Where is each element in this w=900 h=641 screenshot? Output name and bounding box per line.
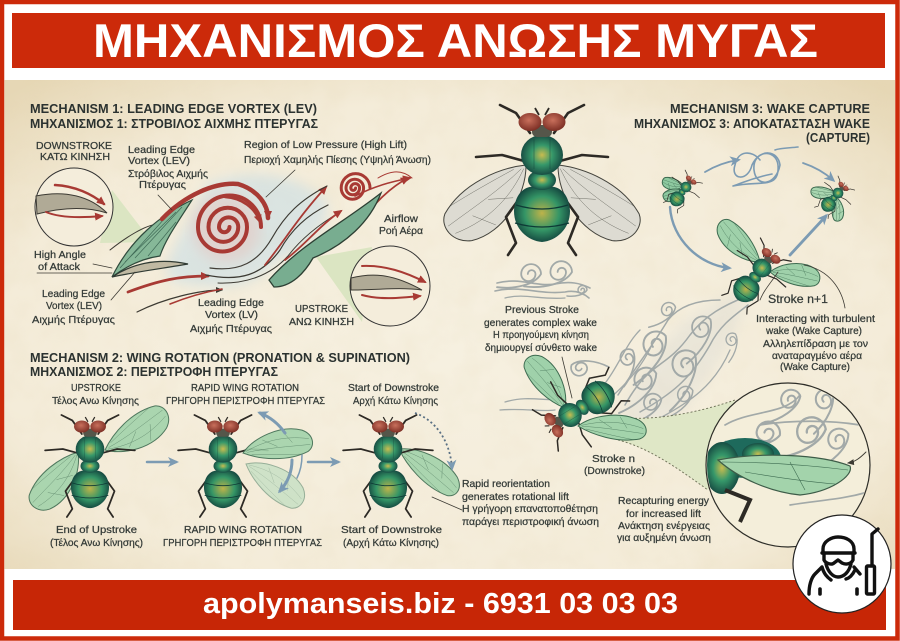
parchment background panel: [4, 80, 895, 569]
labels: mechanism 2: Αρχή Κάτω Κίνησης: [353, 395, 438, 407]
downstroke zoom circle: [35, 168, 113, 246]
leading edge vortex spiral: [162, 184, 268, 262]
labels: mechanism 3: Previous Stroke: [505, 304, 579, 316]
callout wedge to detail circle: [618, 400, 735, 490]
labels: mechanism 2: (Τέλος Ανω Κίνησης): [50, 537, 143, 549]
fly: stroke n downstroke: [500, 349, 648, 463]
panel: mechanism 3 wake capture: [484, 102, 875, 547]
labels: mechanism 3: Interacting with turbulent: [756, 313, 875, 325]
labels: mechanism 3: generates complex wake: [484, 317, 597, 329]
heading: mechanism 1: ΜΗΧΑΝΙΣΜΟΣ 1: ΣΤΡΟΒΙΛΟΣ ΑΙΧΜΗΣ ΠΤΕΡΥΓΑΣ: [30, 117, 318, 131]
labels: mechanism 2: Τέλος Ανω Κίνησης: [52, 395, 139, 407]
small fly top right: [808, 172, 860, 224]
heading: mechanism 1: MECHANISM 1: LEADING EDGE VORTEX (LEV): [30, 102, 317, 116]
footer contact banner: apolymanseis.biz - 6931 03 03 03: [203, 588, 678, 620]
labels: mechanism 3: Η προηγούμενη κίνηση: [493, 329, 589, 341]
detail circle: wing and wake: [704, 383, 870, 547]
fly: start of downstroke: [343, 413, 466, 517]
leading edge wing profile: [112, 200, 192, 277]
labels: mechanism 2: παράγει περιστροφική άνωση: [462, 516, 599, 528]
labels: mechanism 1: UPSTROKE: [295, 303, 348, 315]
labels: mechanism 1: Region of Low Pressure (High Lift): [244, 139, 407, 151]
heading: mechanism 1: [30, 102, 318, 131]
labels: mechanism 2: Η γρήγορη επανατοποθέτηση: [462, 503, 598, 515]
title banner: ΜΗΧΑΝΙΣΜΟΣ ΑΝΩΣΗΣ ΜΥΓΑΣ: [93, 14, 818, 67]
fly: rapid wing rotation: [178, 413, 314, 517]
heading: mechanism 3: (CAPTURE): [806, 131, 870, 145]
labels: mechanism 1: Αιχμής Πτέρυγας: [190, 323, 272, 335]
heading: mechanism 2: ΜΗΧΑΝΙΣΜΟΣ 2: ΠΕΡΙΣΤΡΟΦΗ ΠΤΕΡΥΓΑΣ: [30, 365, 278, 379]
labels: mechanism 3: Stroke n: [592, 453, 635, 465]
labels: mechanism 1: Leading Edge: [42, 288, 105, 300]
labels: mechanism 2: generates rotational lift: [462, 491, 569, 503]
logo: pest control technician icon: [793, 515, 891, 613]
labels: mechanism 2: Rapid reorientation: [462, 478, 550, 490]
labels: mechanism 1: Vortex (LEV): [46, 300, 102, 312]
fly: stroke n+1: [710, 215, 845, 323]
heading: mechanism 3: MECHANISM 3: WAKE CAPTURE: [670, 102, 870, 116]
small wake swirl: [495, 261, 590, 298]
arrow: rotation step 2: [308, 461, 338, 463]
labels: mechanism 1: Leading Edge: [128, 144, 195, 156]
labels: mechanism 1: Περιοχή Χαμηλής Πίεσης (Υψηλή Άνωση): [244, 154, 431, 166]
labels: mechanism 3: for increased lift: [626, 508, 701, 520]
leader lines: [37, 170, 295, 300]
labels: mechanism 1: ΑΝΩ ΚΙΝΗΣΗ: [289, 316, 354, 328]
labels: mechanism 3: για αυξημένη άνωση: [617, 532, 711, 544]
labels: mechanism 2: [50, 382, 599, 549]
labels: mechanism 1: DOWNSTROKE: [36, 140, 112, 152]
footer contact banner: [13, 580, 886, 630]
labels: mechanism 1: ΚΑΤΩ ΚΙΝΗΣΗ: [40, 151, 110, 163]
labels: mechanism 1: Ροή Αέρα: [379, 225, 423, 237]
labels: mechanism 2: ΓΡΗΓΟΡΗ ΠΕΡΙΣΤΡΟΦΗ ΠΤΕΡΥΓΑΣ: [166, 395, 325, 407]
labels: mechanism 2: UPSTROKE: [71, 382, 121, 394]
small vortex: [341, 174, 370, 199]
callout wedge: upstroke: [316, 247, 372, 322]
large fly illustration: [435, 105, 649, 255]
labels: mechanism 3: [484, 292, 875, 544]
arrow: rotation step 1: [147, 461, 176, 463]
upstroke wing: [269, 193, 381, 287]
labels: mechanism 1: [32, 139, 431, 335]
heading: mechanism 2: MECHANISM 2: WING ROTATION (PRONATION & SUPINATION): [30, 351, 410, 365]
labels: mechanism 3: Αλληλεπίδραση με τον: [763, 338, 868, 350]
upstroke zoom circle: [350, 246, 430, 326]
labels: mechanism 1: High Angle: [34, 249, 86, 261]
labels: mechanism 3: (Wake Capture): [780, 361, 850, 373]
labels: mechanism 1: Vortex (LV): [205, 309, 258, 321]
labels: mechanism 2: (Αρχή Κάτω Κίνησης): [343, 537, 439, 549]
labels: mechanism 3: (Downstroke): [584, 465, 645, 477]
airflow streamlines: [110, 172, 412, 312]
labels: mechanism 1: Στρόβιλος Αιχμής: [128, 168, 208, 180]
wake turbulence field: [569, 292, 748, 428]
heading: mechanism 3: ΜΗΧΑΝΙΣΜΟΣ 3: ΑΠΟΚΑΤΑΣΤΑΣΗ WAKE: [634, 117, 870, 131]
labels: mechanism 1: of Attack: [38, 261, 81, 273]
labels: mechanism 3: Recapturing energy: [618, 495, 710, 507]
labels: mechanism 1: Πτέρυγας: [139, 179, 186, 191]
labels: mechanism 2: End of Upstroke: [56, 524, 137, 536]
callout wedge: downstroke: [100, 190, 152, 243]
labels: mechanism 1: Airflow: [384, 213, 418, 225]
panel: mechanism 1 leading edge vortex: [30, 102, 431, 335]
heading: mechanism 3: [634, 102, 870, 145]
labels: mechanism 3: αναταραγμένο αέρα: [772, 350, 862, 362]
labels: mechanism 2: ΓΡΗΓΟΡΗ ΠΕΡΙΣΤΡΟΦΗ ΠΤΕΡΥΓΑΣ: [163, 537, 322, 549]
labels: mechanism 3: wake (Wake Capture): [765, 325, 862, 337]
low pressure cloud: [167, 174, 327, 287]
labels: mechanism 2: Start of Downstroke: [341, 524, 442, 536]
labels: mechanism 2: RAPID WING ROTATION: [191, 382, 299, 394]
labels: mechanism 3: Ανάκτηση ενέργειας: [618, 520, 710, 532]
labels: mechanism 3: δημιουργεί σύνθετο wake: [485, 342, 597, 354]
panel: mechanism 2 wing rotation: [23, 351, 599, 549]
labels: mechanism 1: Leading Edge: [198, 297, 264, 309]
wake coil: [733, 147, 798, 186]
flight path arrows: [670, 160, 833, 268]
labels: mechanism 3: Stroke n+1: [768, 292, 828, 306]
small fly top left: [657, 166, 708, 218]
fly: end of upstroke: [23, 399, 176, 518]
labels: mechanism 2: RAPID WING ROTATION: [184, 524, 302, 536]
labels: mechanism 2: Start of Downstroke: [348, 382, 439, 394]
heading: mechanism 2: [30, 351, 410, 379]
labels: mechanism 1: Vortex (LEV): [128, 155, 190, 167]
labels: mechanism 1: Αιχμής Πτέρυγας: [32, 314, 115, 326]
